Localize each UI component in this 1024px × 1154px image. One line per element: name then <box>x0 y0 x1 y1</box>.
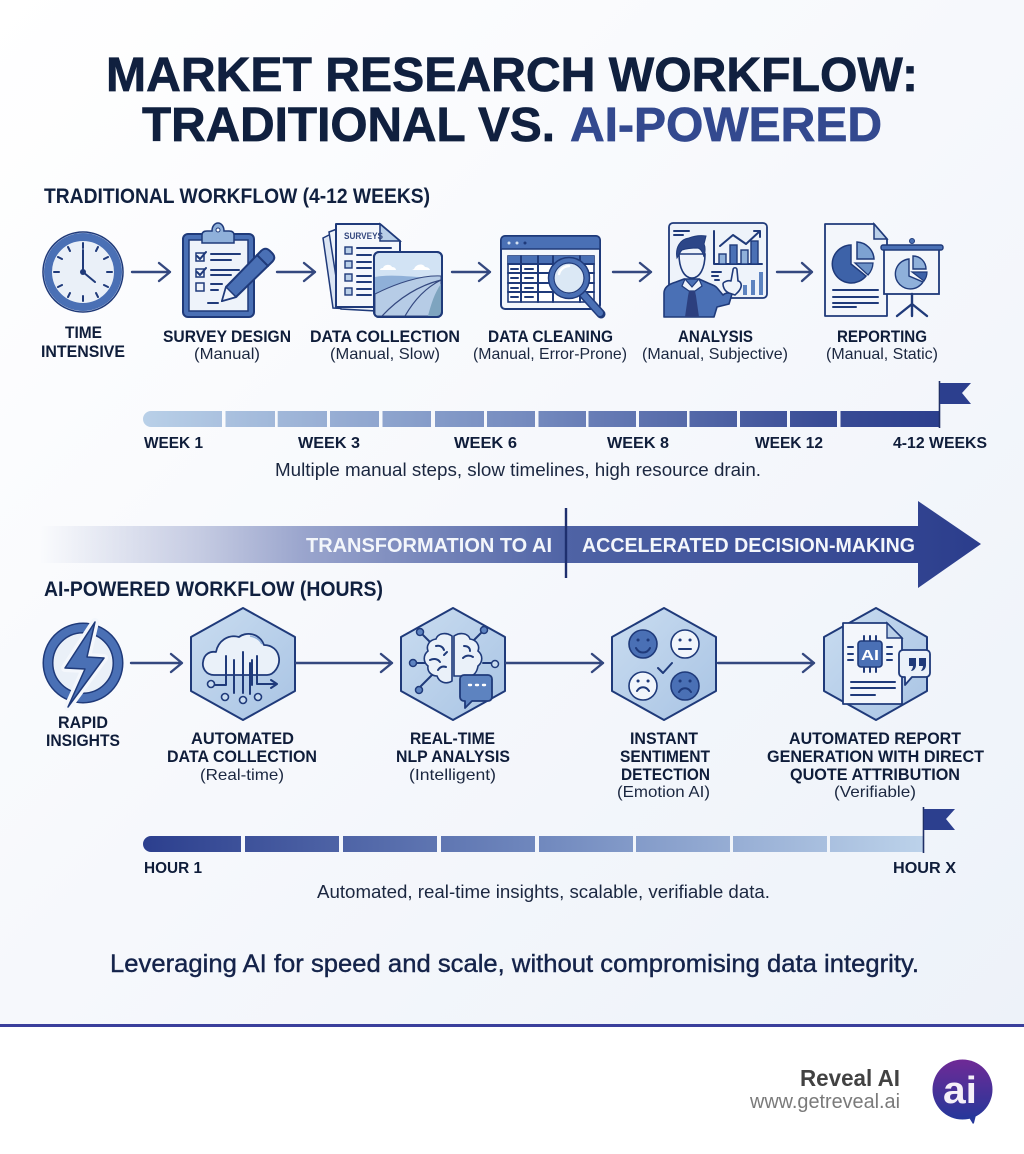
label: rapid insights: RAPID <box>58 713 108 732</box>
label: automated report generation: AUTOMATED REPORT <box>789 729 962 748</box>
label: automated data collection: (Real-time) <box>200 767 284 784</box>
label: time intensive <box>41 323 125 361</box>
arrow 6 <box>131 654 182 672</box>
timeline labels: weeks: WEEK 6 <box>454 435 517 452</box>
timeline labels: weeks <box>144 435 987 452</box>
label: data cleaning: DATA CLEANING <box>488 327 613 346</box>
footer url: www.getreveal.ai <box>749 1091 900 1113</box>
timeline labels: weeks: 4-12 WEEKS <box>893 435 987 452</box>
title: TRADITIONAL VS. <box>142 99 555 152</box>
title <box>106 49 918 152</box>
icon: survey clipboard <box>183 223 274 317</box>
timeline: traditional weeks <box>143 381 971 428</box>
transformation arrow: TRANSFORMATION TO AI <box>306 535 552 557</box>
arrow 3 <box>452 263 490 281</box>
label: instant sentiment detection: (Emotion AI) <box>617 784 710 801</box>
title: AI-POWERED <box>570 99 882 152</box>
icon: clock <box>43 232 123 312</box>
footer brand name: Reveal AI <box>800 1065 900 1091</box>
caption: traditional: Multiple manual steps, slow timelines, high resource drain. <box>275 460 761 480</box>
heading: traditional workflow: TRADITIONAL WORKFLOW (4-12 WEEKS) <box>44 185 430 208</box>
arrow 5 <box>777 263 812 281</box>
label: data collection: (Manual, Slow) <box>330 346 440 363</box>
label: instant sentiment detection <box>617 729 711 801</box>
label: rapid insights <box>46 713 120 750</box>
timeline labels: weeks: WEEK 1 <box>144 435 203 452</box>
label: analysis: ANALYSIS <box>678 327 753 346</box>
transformation arrow: ACCELERATED DECISION-MAKING <box>582 535 915 557</box>
label: automated report generation: GENERATION WITH DIRECT <box>767 747 985 766</box>
label: real-time NLP analysis: REAL-TIME <box>410 729 495 748</box>
icon: AI report in hexagon <box>824 608 930 720</box>
label: data collection: DATA COLLECTION <box>310 327 460 346</box>
timeline: AI hours <box>143 807 955 853</box>
label: data cleaning <box>473 327 627 363</box>
label: real-time NLP analysis: NLP ANALYSIS <box>396 747 510 766</box>
label: automated data collection: DATA COLLECTION <box>167 747 317 766</box>
arrow 2 <box>277 263 315 281</box>
label: automated report generation <box>767 729 985 801</box>
arrow 1 <box>132 263 170 281</box>
label: analysis: (Manual, Subjective) <box>642 346 788 363</box>
timeline labels: hours: HOUR X <box>893 860 956 877</box>
label: real-time NLP analysis: (Intelligent) <box>409 767 496 784</box>
label: survey design <box>163 327 291 363</box>
label: instant sentiment detection: INSTANT <box>630 729 699 748</box>
label: automated data collection: AUTOMATED <box>191 729 294 748</box>
icon: analyst with charts <box>664 223 767 317</box>
timeline labels: hours <box>144 860 956 877</box>
timeline labels: weeks: WEEK 8 <box>607 435 669 452</box>
label: data cleaning: (Manual, Error-Prone) <box>473 346 627 363</box>
label: time intensive: INTENSIVE <box>41 342 125 361</box>
timeline labels: hours: HOUR 1 <box>144 860 202 877</box>
label: time intensive: TIME <box>65 323 102 342</box>
icon: report and presentation <box>825 224 943 316</box>
icon: cloud in hexagon <box>191 608 295 720</box>
label: automated data collection <box>167 729 317 784</box>
logo: ai <box>943 1070 977 1112</box>
label: instant sentiment detection: DETECTION <box>621 765 710 784</box>
heading: AI-powered workflow: AI-POWERED WORKFLOW (HOURS) <box>44 578 383 601</box>
label: survey design: SURVEY DESIGN <box>163 327 291 346</box>
label: automated report generation: (Verifiable) <box>834 784 916 801</box>
icon: surveys and landscape <box>323 224 442 317</box>
label: instant sentiment detection: SENTIMENT <box>620 747 711 766</box>
arrow 8 <box>506 654 603 672</box>
label: reporting: REPORTING <box>837 327 927 346</box>
arrow 9 <box>718 654 814 672</box>
icon: data table with magnifier <box>501 236 601 314</box>
arrow 7 <box>296 654 392 672</box>
timeline labels: weeks: WEEK 3 <box>298 435 360 452</box>
label: data collection <box>310 327 460 363</box>
label: survey design: (Manual) <box>194 346 260 363</box>
footer <box>0 1024 1024 1154</box>
closing statement: Leveraging AI for speed and scale, without compromising data integrity. <box>110 950 919 978</box>
timeline labels: weeks: WEEK 12 <box>755 435 823 452</box>
icon: lightning ring <box>48 622 118 707</box>
title: MARKET RESEARCH WORKFLOW: <box>106 49 918 102</box>
label: automated report generation: QUOTE ATTRIBUTION <box>790 765 960 784</box>
icon: AI report in hexagon: AI <box>861 647 879 664</box>
caption: AI: Automated, real-time insights, scalable, verifiable data. <box>317 882 770 902</box>
arrow 4 <box>613 263 651 281</box>
label: rapid insights: INSIGHTS <box>46 731 120 750</box>
icon: sentiment faces in hexagon <box>612 608 716 720</box>
label: reporting <box>826 327 938 363</box>
label: analysis <box>642 327 788 363</box>
transformation arrow <box>40 501 981 588</box>
logo <box>932 1060 992 1124</box>
icon: brain in hexagon <box>401 608 505 720</box>
icon: surveys and landscape: SURVEYS <box>344 231 383 241</box>
label: real-time NLP analysis <box>396 729 510 784</box>
label: reporting: (Manual, Static) <box>826 346 938 363</box>
